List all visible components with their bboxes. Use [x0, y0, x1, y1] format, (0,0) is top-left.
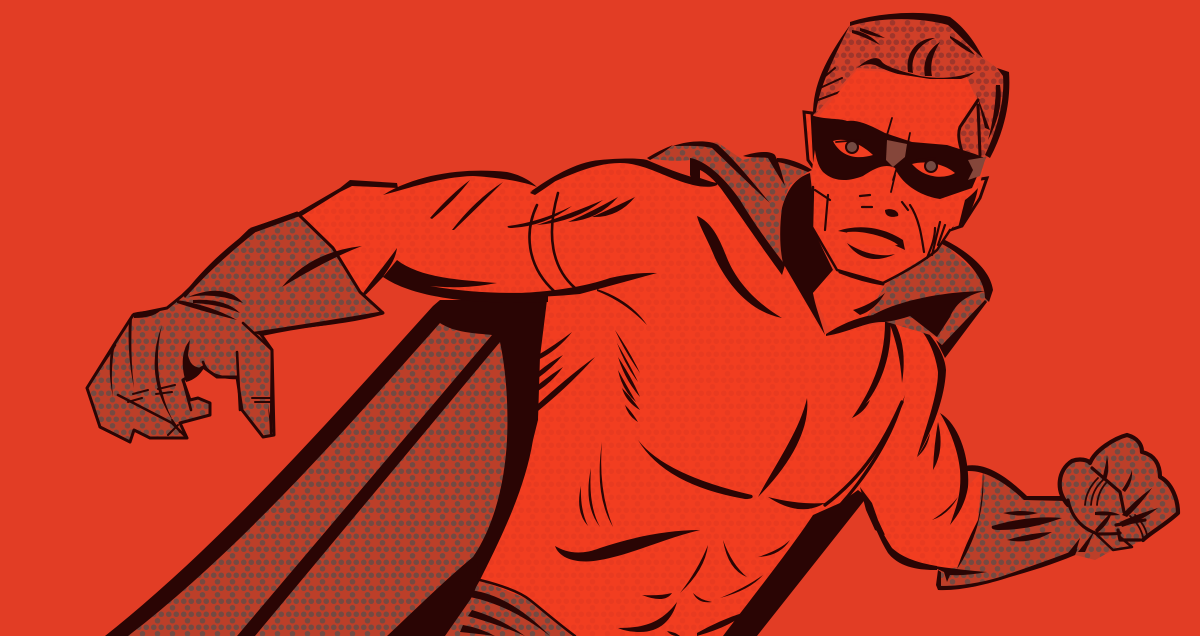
shoulder cape [647, 141, 812, 275]
hair ink [813, 13, 1009, 158]
lower belt area [425, 557, 575, 636]
arm outline [297, 158, 717, 230]
irises [846, 141, 937, 172]
right fist [1060, 435, 1178, 560]
mask nose bridge [886, 140, 907, 167]
brow and cheek lines [836, 118, 935, 192]
nose and face lines [815, 190, 945, 258]
torso and arms [297, 160, 983, 636]
face [812, 70, 985, 283]
jaw line [840, 272, 883, 284]
right gloved arm [928, 465, 1090, 590]
dark side stripe on torso [723, 490, 867, 636]
left gloved hand [87, 212, 384, 442]
mask tip [968, 157, 986, 180]
body ink lines [500, 193, 968, 636]
head [804, 13, 1009, 283]
collar [826, 240, 993, 358]
mask [811, 115, 985, 199]
left eye [833, 140, 873, 157]
flowing cape [105, 298, 548, 636]
mouth [838, 227, 905, 259]
ears [804, 112, 987, 230]
neck shadow [780, 173, 833, 335]
dark underside of the arm [360, 248, 548, 303]
neck [813, 270, 883, 333]
right eye [912, 162, 955, 177]
hair [813, 14, 1008, 160]
face outline [812, 187, 950, 283]
